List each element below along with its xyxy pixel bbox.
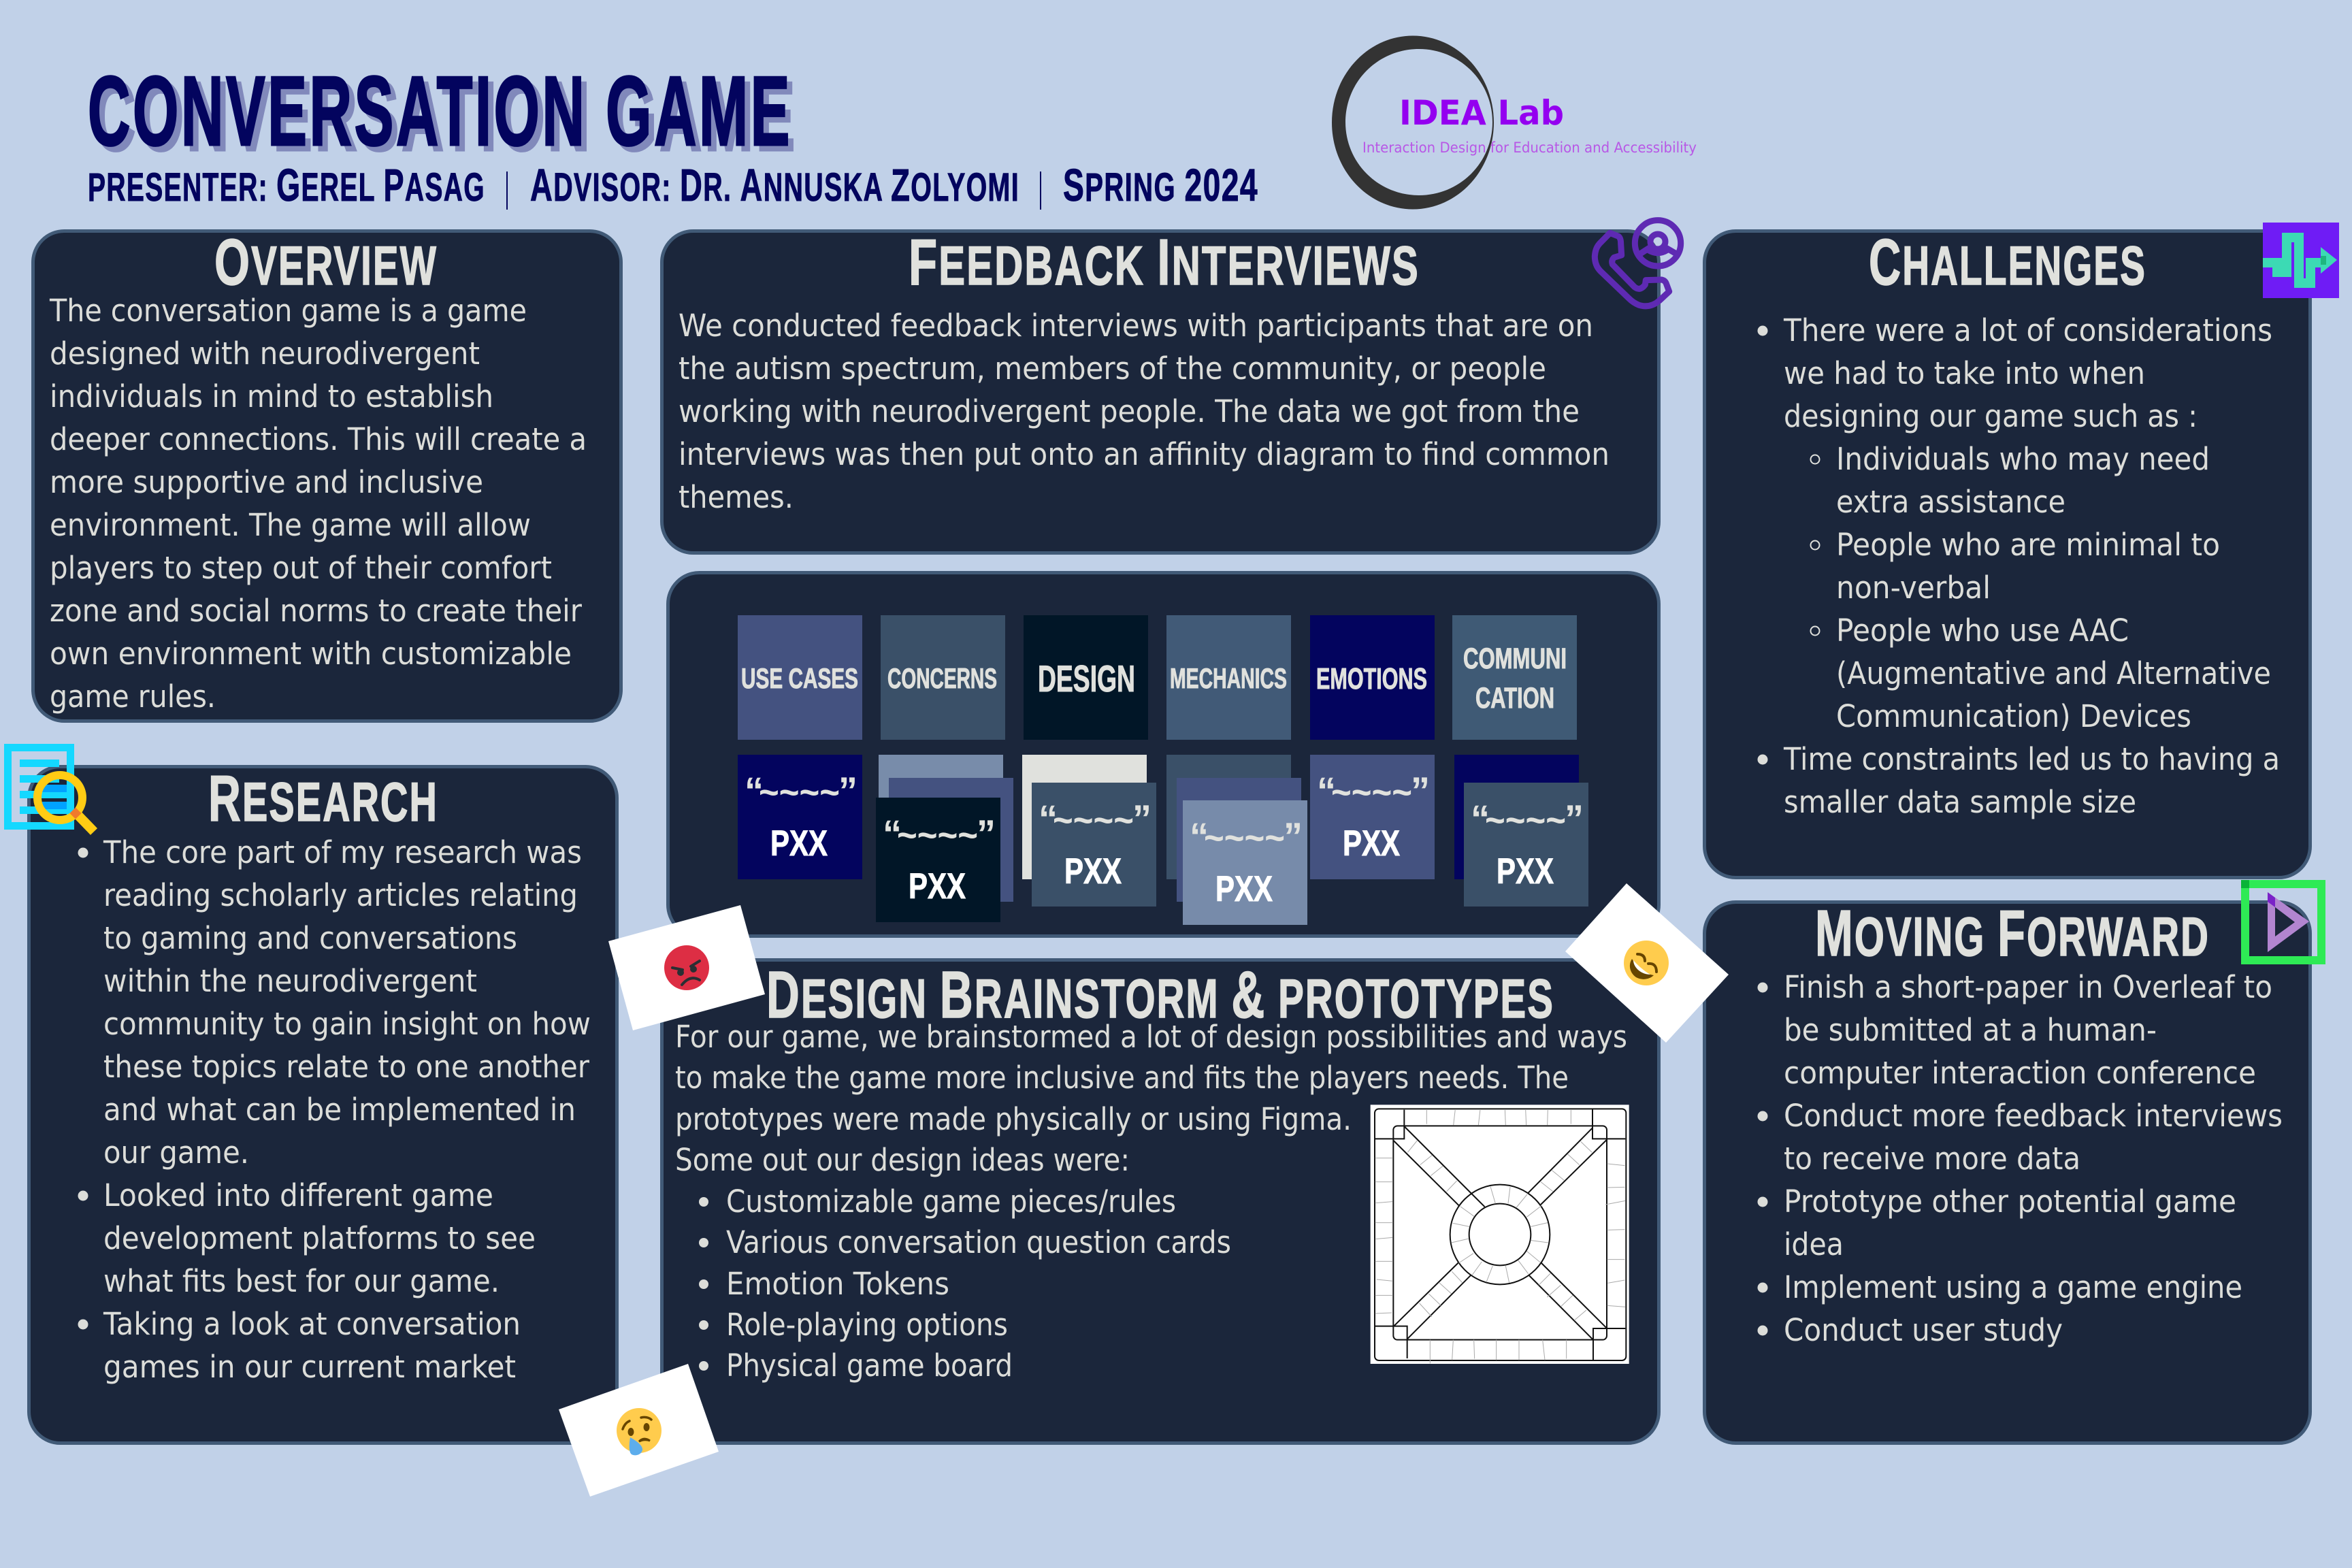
card: mechanics — [1166, 615, 1291, 740]
text: design body: Some out our design ideas were: — [675, 1142, 1130, 1178]
quote card 2 stack: “ — [883, 812, 902, 855]
subtitle: presenter, advisor, term: ADVISOR: DR. ANNUSKA ZOLYOMI — [530, 160, 1019, 211]
quote card 4 stack: ” — [1284, 815, 1303, 858]
quote card 1: ~~~~ — [759, 770, 840, 813]
text: design body: prototypes were made physically or using Figma. — [675, 1101, 1352, 1137]
heading: moving forward: MOVING FORWARD — [1815, 897, 2210, 970]
text: moving forward bullets: idea — [1784, 1226, 1844, 1262]
quote card 5: ” — [1411, 769, 1430, 812]
text: challenges bullets: smaller data sample size — [1784, 784, 2136, 820]
text: research bullets: Looked into different game — [103, 1177, 493, 1213]
card: use cases: USE CASES — [741, 662, 858, 694]
text: challenges bullets: designing our game such as : — [1784, 398, 2198, 434]
text: feedback body: interviews was then put onto an affinity diagram to find common — [679, 436, 1610, 472]
logo: IDEA Lab: IDEA Lab — [1399, 93, 1564, 133]
quote card 3 stack — [1022, 755, 1156, 906]
text: challenges bullets: Individuals who may need — [1836, 441, 2210, 477]
card: communication: COMMUNI — [1463, 642, 1567, 675]
card: emotions: EMOTIONS — [1316, 662, 1427, 696]
text: research bullets — [78, 834, 591, 1385]
text: overview body: game rules. — [50, 679, 216, 715]
text: challenges bullets: There were a lot of considerations — [1783, 312, 2272, 348]
text: overview body: designed with neurodivergent — [50, 336, 480, 372]
logo: IDEA Lab — [1332, 35, 1697, 210]
quote card 3 stack: PXX — [1064, 851, 1122, 892]
card: concerns: CONCERNS — [887, 662, 997, 694]
card: communication: CATION — [1475, 682, 1554, 715]
text: overview body — [49, 293, 587, 715]
quote card 1: PXX — [770, 823, 828, 864]
heading: feedback interviews: FEEDBACK INTERVIEWS — [909, 226, 1420, 299]
text: research bullets: development platforms to see — [103, 1220, 536, 1256]
text: moving forward bullets: Conduct user study — [1784, 1312, 2063, 1348]
text: overview body: environment. The game will allow — [50, 507, 531, 543]
text: research bullets: reading scholarly articles relating — [103, 877, 578, 913]
quote card 2 stack — [876, 755, 1013, 922]
sticker: angry emoji — [608, 905, 765, 1030]
text: feedback body: themes. — [679, 479, 794, 515]
text: research bullets: games in our current market — [103, 1349, 516, 1385]
text: feedback body: the autism spectrum, members of the community, or people — [679, 350, 1546, 387]
icon: play button — [2241, 880, 2321, 960]
text: challenges bullets: we had to take into when — [1784, 355, 2145, 391]
subtitle: presenter, advisor, term — [88, 160, 1258, 211]
text: overview body: deeper connections. This will create a — [50, 421, 587, 457]
quote card 6 stack: PXX — [1497, 851, 1554, 892]
text: design body: Physical game board — [726, 1348, 1013, 1384]
title: CONVERSATION GAME — [88, 56, 792, 166]
card: design: DESIGN — [1038, 657, 1135, 700]
text: moving forward bullets: Prototype other potential game — [1784, 1183, 2236, 1220]
text: overview body: The conversation game is a game — [49, 293, 527, 329]
text: challenges bullets: non-verbal — [1836, 570, 1991, 606]
text: research bullets: and what can be implemented in — [103, 1092, 576, 1128]
text: challenges bullets: People who are minimal to — [1836, 527, 2220, 563]
quote card 1: ” — [838, 769, 858, 812]
heading: research: RESEARCH — [208, 762, 438, 835]
icon: document and magnifier — [8, 747, 94, 832]
quote card 3 stack: “ — [1039, 797, 1058, 840]
quote card 4 stack: PXX — [1215, 869, 1273, 909]
icon: signal arrow — [2263, 223, 2339, 298]
panel: feedback interviews — [662, 226, 1659, 553]
quote card 5: ~~~~ — [1331, 770, 1412, 813]
card: mechanics: MECHANICS — [1170, 662, 1287, 694]
heading: overview: OVERVIEW — [214, 226, 438, 299]
quote card 5 — [1310, 755, 1435, 879]
text: overview body: own environment with customizable — [50, 636, 572, 672]
heading: design brainstorm and prototypes: DESIGN BRAINSTORM & PROTOTYPES — [766, 958, 1554, 1032]
text: design body — [675, 1019, 1627, 1384]
text: design body: For our game, we brainstormed a lot of design possibilities and ways — [675, 1019, 1627, 1055]
text: overview body: zone and social norms to create their — [50, 593, 582, 629]
sticker: laughing emoji — [1565, 883, 1729, 1043]
quote card 4 stack: ~~~~ — [1204, 816, 1285, 859]
icon: phone with person — [1595, 220, 1681, 306]
panel: design brainstorm and prototypes — [662, 958, 1659, 1443]
text: design body: Role-playing options — [726, 1307, 1008, 1343]
text: research bullets: Taking a look at conversation — [103, 1306, 521, 1342]
card: use cases — [738, 615, 862, 740]
quote card 4 stack: “ — [1190, 815, 1209, 858]
text: moving forward bullets: Implement using a game engine — [1784, 1269, 2242, 1305]
logo: IDEA Lab: Interaction Design for Education and Accessibility — [1362, 140, 1697, 156]
text: moving forward bullets: to receive more data — [1784, 1141, 2080, 1177]
quote card 3 stack: ” — [1132, 797, 1152, 840]
panel: affinity diagram cards — [668, 573, 1659, 936]
text: overview body: players to step out of their comfort — [50, 550, 552, 586]
text: design body: Customizable game pieces/rules — [726, 1183, 1176, 1220]
text: overview body: individuals in mind to establish — [50, 378, 493, 414]
quote card 6 stack: “ — [1471, 797, 1490, 840]
text: feedback body: We conducted feedback interviews with participants that are on — [679, 308, 1593, 344]
text: research bullets: within the neurodivergent — [103, 963, 477, 999]
panel: challenges — [1704, 226, 2310, 878]
card: concerns — [881, 615, 1005, 740]
text: research bullets: these topics relate to one another — [103, 1049, 589, 1085]
quote card 4 stack — [1166, 755, 1307, 925]
text: research bullets: what fits best for our game. — [103, 1263, 500, 1299]
text: challenges bullets — [1757, 312, 2280, 820]
text: moving forward bullets — [1757, 969, 2283, 1348]
quote card 6 stack: ~~~~ — [1485, 798, 1566, 841]
text: moving forward bullets: computer interaction conference — [1784, 1055, 2256, 1091]
quote card 1 — [738, 755, 862, 879]
quote card 6 stack — [1454, 755, 1588, 906]
quote card 6 stack: ” — [1565, 797, 1584, 840]
text: overview body: more supportive and inclusive — [50, 464, 483, 500]
text: design body: to make the game more inclusive and fits the players needs. The — [675, 1060, 1569, 1096]
text: research bullets: to gaming and conversations — [103, 920, 517, 956]
panel: research — [29, 762, 617, 1443]
text: challenges bullets: (Augmentative and Alternative — [1836, 655, 2271, 691]
card: emotions — [1310, 615, 1435, 740]
text: challenges bullets: People who use AAC — [1836, 612, 2129, 649]
text: challenges bullets: Communication) Devices — [1836, 698, 2191, 734]
quote card 2 stack: PXX — [909, 866, 966, 906]
panel: overview — [33, 226, 621, 721]
quote card 1: “ — [745, 769, 764, 812]
card: communication — [1452, 615, 1577, 740]
text: challenges bullets: extra assistance — [1836, 484, 2065, 520]
text: research bullets: The core part of my research was — [103, 834, 582, 870]
game board prototype — [1371, 1105, 1629, 1364]
text: research bullets: our game. — [103, 1134, 249, 1171]
sticker: crying emoji — [559, 1364, 719, 1497]
panel: moving forward — [1704, 897, 2310, 1443]
subtitle: presenter, advisor, term: PRESENTER: GEREL PASAG — [88, 160, 485, 211]
quote card 5: PXX — [1343, 823, 1400, 864]
quote card 2 stack: ~~~~ — [897, 813, 978, 856]
text: moving forward bullets: be submitted at a human- — [1784, 1012, 2157, 1048]
text: feedback body: working with neurodivergent people. The data we got from the — [679, 393, 1580, 429]
text: design body: Various conversation question cards — [726, 1224, 1231, 1260]
text: moving forward bullets: Finish a short-paper in Overleaf to — [1784, 969, 2272, 1005]
card: design — [1024, 615, 1148, 740]
text: moving forward bullets: Conduct more feedback interviews — [1784, 1098, 2283, 1134]
text: challenges bullets: Time constraints led us to having a — [1783, 741, 2280, 777]
heading: challenges: CHALLENGES — [1869, 226, 2146, 299]
quote card 3 stack: ~~~~ — [1053, 798, 1134, 841]
quote card 2 stack: ” — [977, 812, 996, 855]
subtitle: presenter, advisor, term: SPRING 2024 — [1063, 160, 1258, 211]
text: research bullets: community to gain insight on how — [103, 1006, 591, 1042]
quote card 5: “ — [1317, 769, 1336, 812]
text: feedback body — [679, 308, 1610, 515]
text: design body: Emotion Tokens — [726, 1266, 949, 1302]
